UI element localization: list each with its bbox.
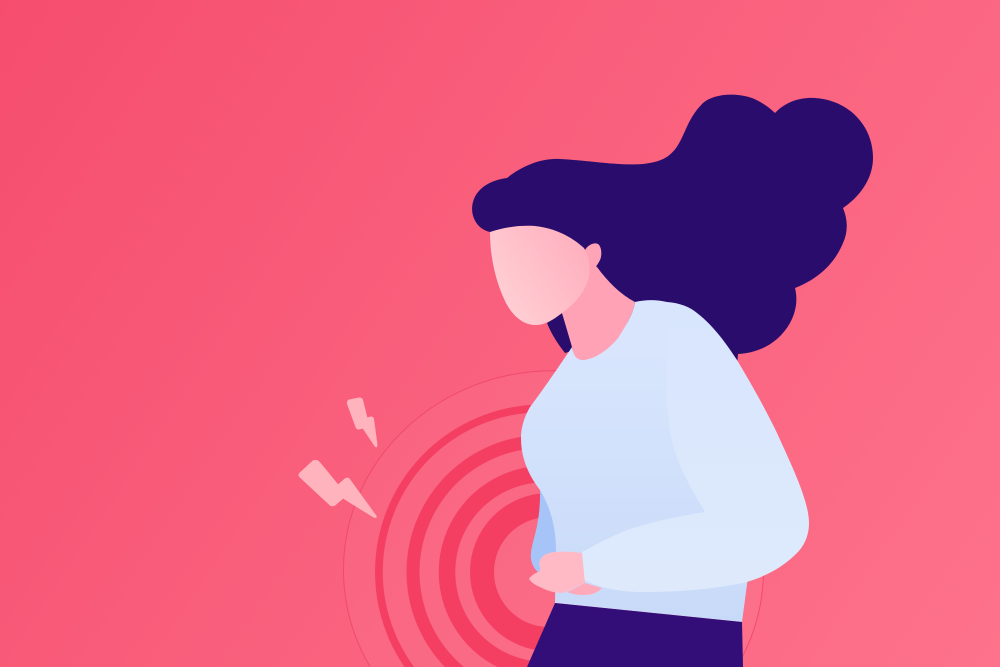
- sweater sleeve: [582, 302, 809, 592]
- neck: [562, 262, 635, 360]
- ear: [585, 243, 601, 268]
- sweater body: [521, 300, 748, 622]
- hair: [472, 95, 873, 365]
- hand: [529, 552, 585, 593]
- hair behind neck: [547, 313, 575, 353]
- pain rings: [344, 371, 764, 667]
- icon: large lightning bolt: [299, 460, 376, 518]
- skirt: [527, 603, 743, 667]
- hand fingers under: [567, 583, 602, 595]
- icon: small lightning bolt: [347, 398, 377, 447]
- face: [490, 226, 590, 325]
- sweater shadow panel: [531, 487, 557, 572]
